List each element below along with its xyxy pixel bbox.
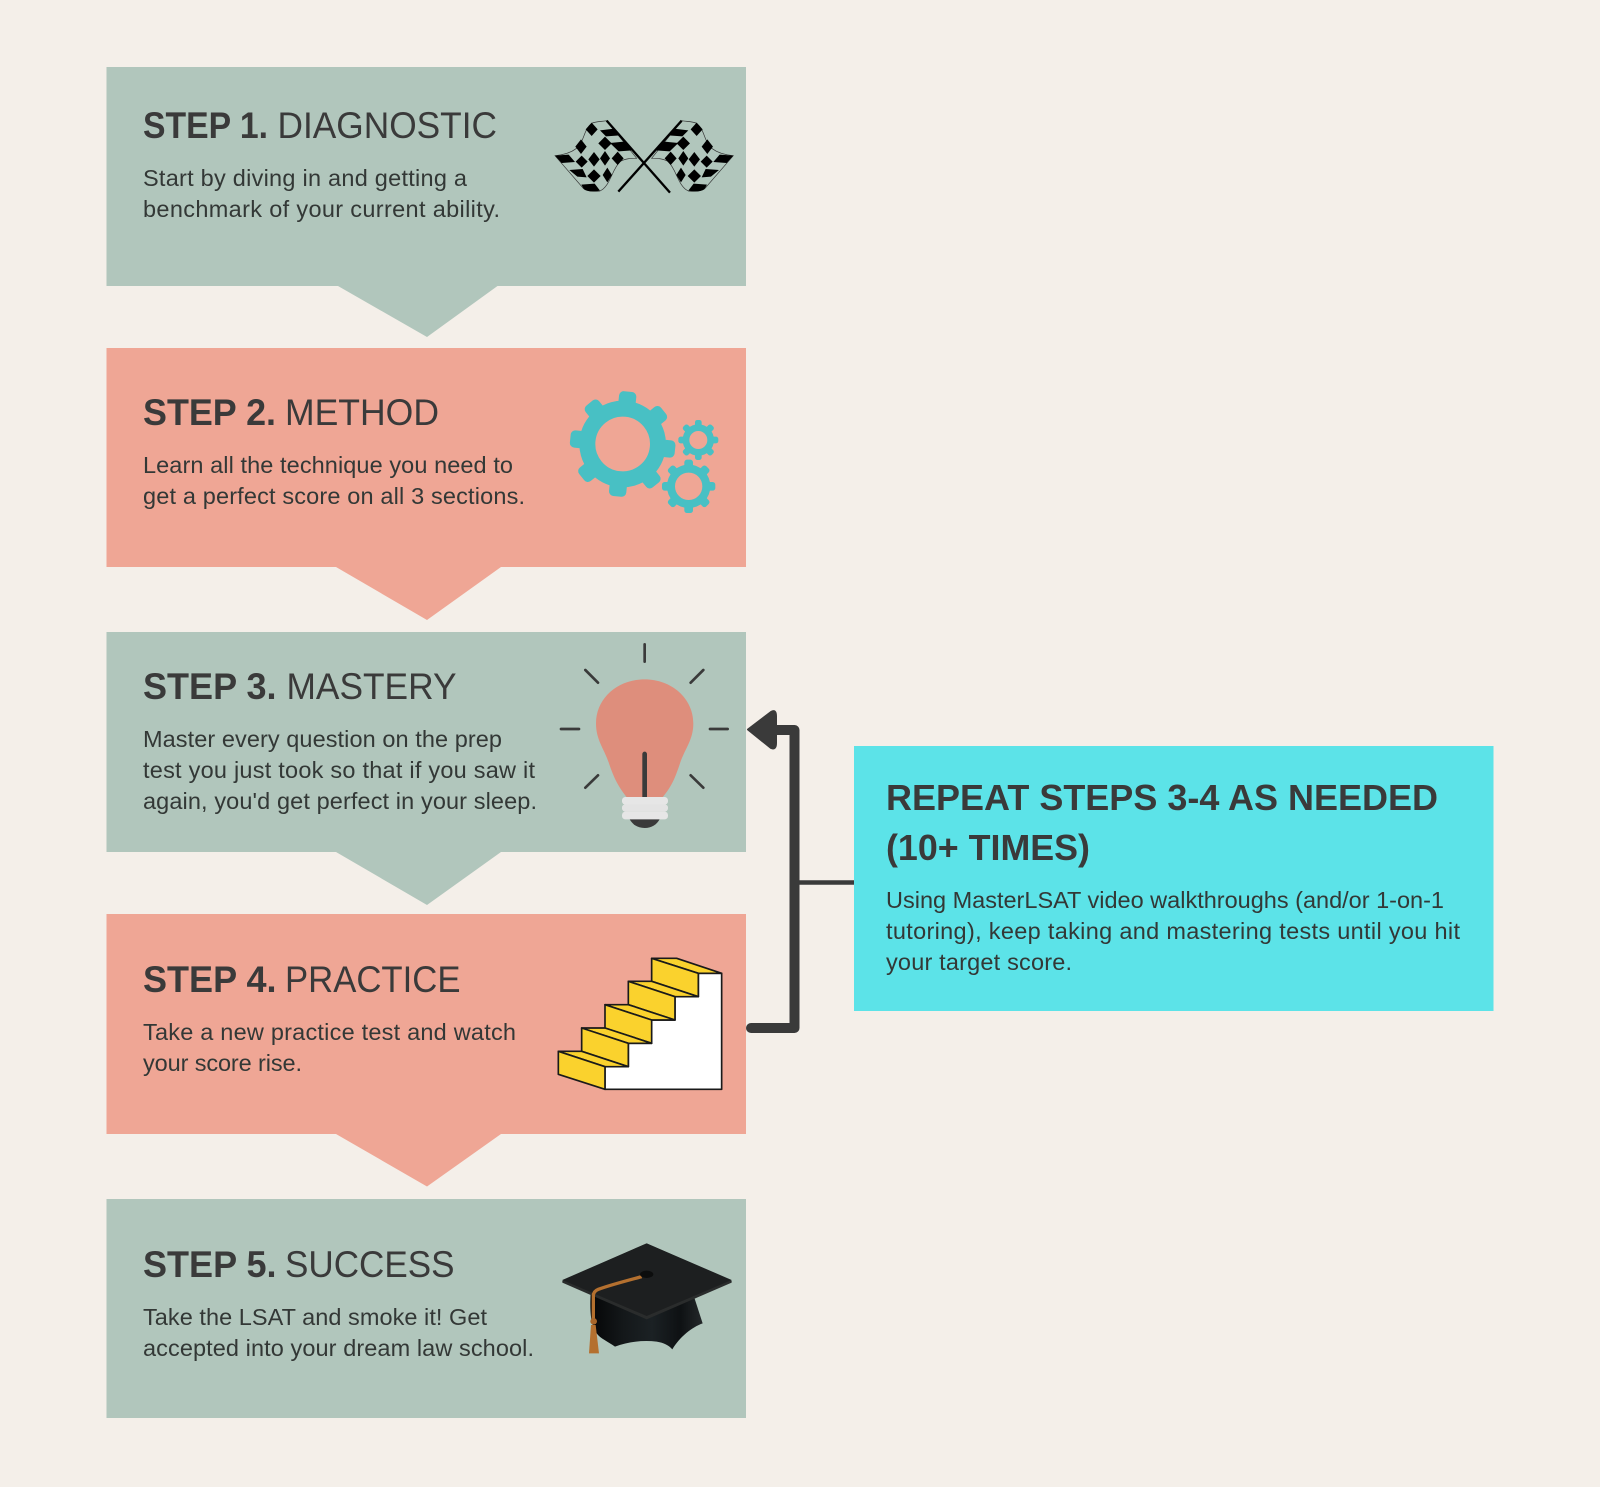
step 3 text: again, you'd get perfect in your sleep. [143, 788, 537, 814]
step 4 box with arrow [106, 914, 746, 1186]
step 1 text: Start by diving in and getting a [143, 165, 468, 191]
step 3 text [143, 726, 537, 814]
panel: step 5 success [106, 1199, 746, 1418]
large gear [565, 386, 681, 502]
step 1 box with arrow [106, 67, 746, 337]
icon: graduation cap [562, 1243, 732, 1353]
step 2 heading: METHOD [285, 392, 439, 433]
callout text: tutoring), keep taking and mastering tests until you hit [886, 918, 1460, 944]
callout heading [886, 777, 1438, 868]
step 4 text: Take a new practice test and watch [143, 1019, 516, 1045]
panel: step 3 mastery [106, 632, 746, 905]
step 5 heading: SUCCESS [285, 1244, 454, 1285]
step 1 heading: STEP 1. [143, 105, 268, 146]
step 2 text: Learn all the technique you need to [143, 452, 513, 478]
right flag [652, 121, 733, 191]
step 3 heading [143, 666, 456, 707]
step 1 text: benchmark of your current ability. [143, 196, 500, 222]
callout heading: (10+ TIMES) [886, 827, 1090, 868]
panel: step 1 diagnostic [106, 67, 746, 337]
step 2 heading: STEP 2. [143, 392, 276, 433]
step 3 text: test you just took so that if you saw it [143, 757, 535, 783]
step 2 text [143, 452, 525, 509]
step 5 heading [143, 1244, 454, 1285]
step 4 heading: PRACTICE [285, 959, 460, 1000]
step 3 heading: STEP 3. [143, 666, 276, 707]
panel: step 2 method [106, 348, 746, 620]
small gear top [678, 420, 718, 460]
step 2 heading [143, 392, 439, 433]
step 1 heading: DIAGNOSTIC [278, 105, 497, 146]
step 4 text [143, 1019, 516, 1076]
left flag [555, 121, 637, 191]
icon: yellow stairs [558, 958, 722, 1089]
callout text [886, 887, 1460, 975]
step 1 heading [143, 105, 497, 146]
callout text: Using MasterLSAT video walkthroughs (and/or 1-on-1 [886, 887, 1444, 913]
icon: gears [565, 386, 718, 513]
panel: repeat callout [854, 746, 1494, 1011]
step 5 text: Take the LSAT and smoke it! Get [143, 1304, 487, 1330]
step 2 box with arrow [106, 348, 746, 620]
step 4 heading [143, 959, 460, 1000]
icon: light bulb [561, 644, 728, 828]
connector arrow: repeat loop [748, 711, 854, 1028]
step 4 text: your score rise. [143, 1050, 302, 1076]
icon: checkered flags [555, 121, 733, 193]
step 3 heading: MASTERY [286, 666, 456, 707]
crossed poles [607, 121, 682, 193]
step 5 box [106, 1199, 746, 1418]
step 1 text [143, 165, 500, 222]
step 2 text: get a perfect score on all 3 sections. [143, 483, 525, 509]
panel: step 4 practice [106, 914, 746, 1186]
small gear bottom [662, 460, 715, 513]
step 3 text: Master every question on the prep [143, 726, 502, 752]
step 4 heading: STEP 4. [143, 959, 276, 1000]
callout text: your target score. [886, 949, 1072, 975]
callout box [854, 746, 1494, 1011]
step 5 text [143, 1304, 534, 1361]
step 5 text: accepted into your dream law school. [143, 1335, 534, 1361]
callout heading: REPEAT STEPS 3-4 AS NEEDED [886, 777, 1438, 818]
step 5 heading: STEP 5. [143, 1244, 276, 1285]
step 3 box with arrow [106, 632, 746, 905]
